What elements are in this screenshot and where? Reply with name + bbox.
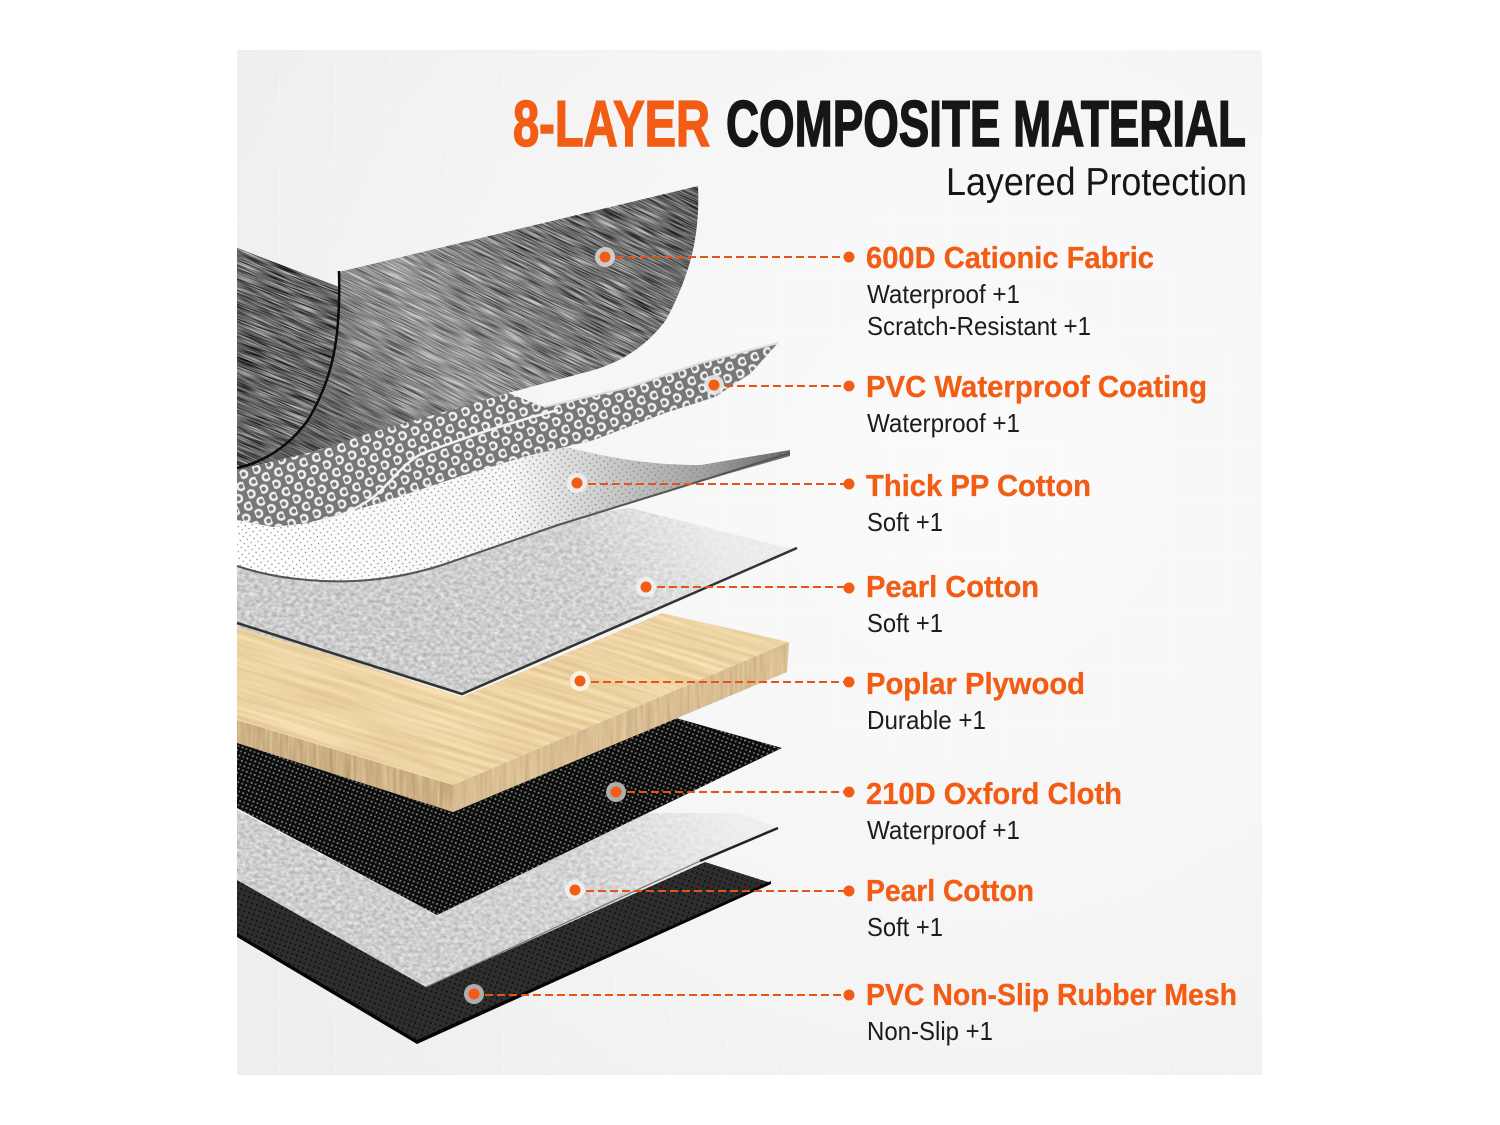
callout: 600D cationic fabric <box>595 240 1154 341</box>
callout: 210D oxford cloth: 210D Oxford Cloth <box>866 776 1122 811</box>
callout: thick PP cotton: Soft +1 <box>867 507 943 537</box>
layer: 600D cationic fabric <box>236 186 698 470</box>
layer: pearl cotton upper <box>237 500 802 700</box>
layer: PVC waterproof coating <box>237 343 778 527</box>
panel: background <box>237 50 1262 1075</box>
callout: thick PP cotton <box>567 468 1091 537</box>
callout: poplar plywood: Durable +1 <box>867 705 986 735</box>
callout: pearl cotton upper <box>636 569 1039 638</box>
callout: 210D oxford cloth <box>606 776 1122 845</box>
callout: PVC waterproof coating: Waterproof +1 <box>867 408 1020 438</box>
callout: pearl cotton lower: Soft +1 <box>867 912 943 942</box>
panel: material layers <box>236 186 854 1044</box>
callout: 600D cationic fabric: 600D Cationic Fabric <box>866 240 1154 275</box>
subtitle: Layered Protection <box>946 161 1247 204</box>
layer: poplar plywood <box>237 613 789 812</box>
callout: 600D cationic fabric: Waterproof +1 <box>867 279 1020 309</box>
callout: 210D oxford cloth: Waterproof +1 <box>867 815 1020 845</box>
callout: pearl cotton upper: Pearl Cotton <box>866 569 1039 604</box>
callout: PVC non-slip rubber mesh: PVC Non-Slip Rubber Mesh <box>866 977 1237 1012</box>
layer: thick PP cotton <box>237 447 790 581</box>
title: orange part: 8-LAYER <box>513 87 710 160</box>
title: black part: COMPOSITE MATERIAL <box>726 87 1246 160</box>
callout: pearl cotton lower: Pearl Cotton <box>866 873 1034 908</box>
callout: thick PP cotton: Thick PP Cotton <box>866 468 1091 503</box>
callout: 600D cationic fabric: Scratch-Resistant +1 <box>867 311 1091 341</box>
callout: PVC non-slip rubber mesh: Non-Slip +1 <box>867 1016 993 1046</box>
callout: PVC non-slip rubber mesh <box>464 977 1237 1046</box>
callout: poplar plywood <box>570 666 1085 735</box>
callout: pearl cotton lower <box>565 873 1034 942</box>
callout: poplar plywood: Poplar Plywood <box>866 666 1085 701</box>
callout: PVC waterproof coating: PVC Waterproof Coating <box>866 369 1207 404</box>
infographic <box>236 50 1262 1075</box>
title <box>513 87 1246 160</box>
callouts <box>464 240 1237 1046</box>
callout: PVC waterproof coating <box>704 369 1207 438</box>
layer: pearl cotton lower <box>237 810 778 988</box>
layer: 210D oxford cloth <box>237 718 782 915</box>
callout: pearl cotton upper: Soft +1 <box>867 608 943 638</box>
layer: PVC non-slip rubber mesh <box>237 862 771 1044</box>
